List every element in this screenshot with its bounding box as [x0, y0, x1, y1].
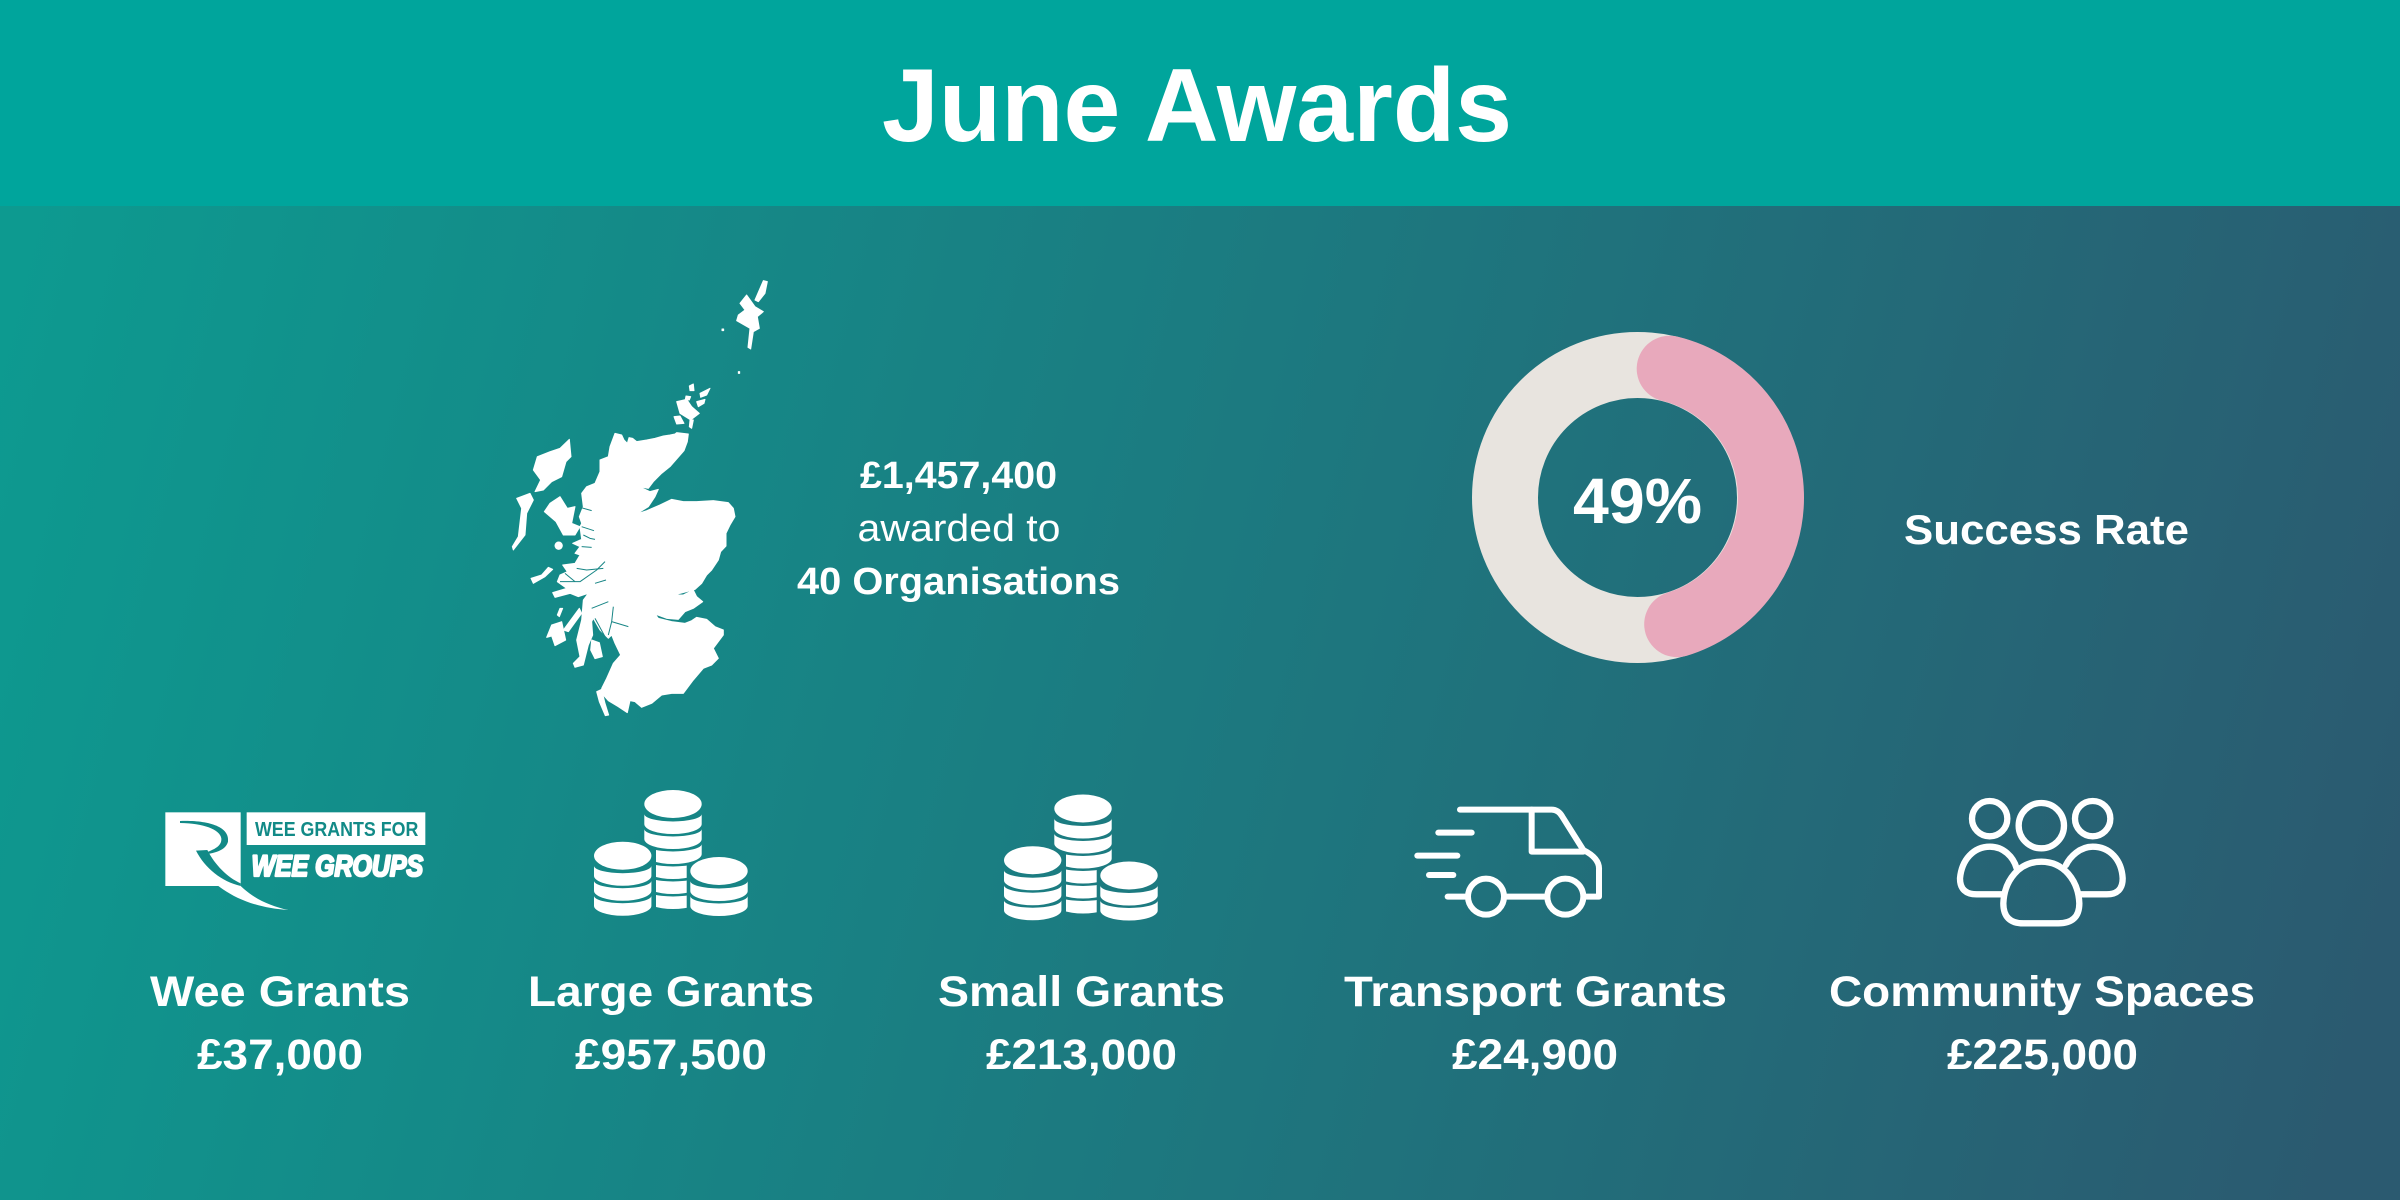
success rate label: Success Rate [1904, 506, 2189, 553]
grant: community spaces [1829, 968, 2255, 1079]
total awarded text: 40 Organisations [797, 561, 1120, 603]
total awarded text [797, 455, 1120, 603]
header band [0, 0, 2400, 206]
Mull and small isles [531, 567, 553, 583]
grant: large grants: £957,500 [575, 1031, 767, 1079]
Arran [591, 640, 602, 659]
grant: community spaces: £225,000 [1947, 1031, 2138, 1079]
grant: large grants [528, 968, 814, 1079]
grant: community spaces: Community Spaces [1829, 968, 2255, 1016]
grant: transport grants: Transport Grants [1344, 968, 1727, 1016]
icon: large grants coins [594, 790, 748, 916]
total awarded text: £1,457,400 [860, 455, 1057, 497]
map of Scotland [512, 281, 767, 716]
Jura and Islay [563, 608, 582, 632]
grant: small grants: Small Grants [938, 968, 1225, 1016]
icon: wee grants logo: WEE GRANTS FOR [255, 819, 419, 841]
title: June Awards [882, 48, 1512, 164]
icon: delivery van [1417, 810, 1599, 915]
grant: large grants: Large Grants [528, 968, 814, 1016]
total awarded text: awarded to [858, 508, 1060, 550]
Orkney [677, 399, 699, 420]
grant: small grants [938, 968, 1225, 1079]
grant: transport grants [1344, 968, 1727, 1079]
donut chart: 49% success rate [1505, 365, 1771, 630]
Skye [544, 497, 580, 535]
grant: wee grants: Wee Grants [150, 968, 410, 1016]
Outer Hebrides [533, 439, 571, 492]
Shetland [755, 281, 767, 302]
grant: transport grants: £24,900 [1452, 1031, 1618, 1079]
grant: wee grants: £37,000 [197, 1031, 363, 1079]
grant: wee grants [150, 968, 410, 1079]
icon: small grants coins [1004, 794, 1158, 920]
icon: wee grants logo [165, 812, 425, 910]
icon: wee grants logo: WEE GROUPS [251, 850, 424, 883]
donut value: 49% [1573, 465, 1702, 537]
sea lochs [560, 507, 628, 637]
grant: small grants: £213,000 [986, 1031, 1177, 1079]
icon: community group of people [1960, 801, 2123, 923]
Rhins of Galloway [597, 689, 609, 716]
mainland [553, 433, 735, 713]
